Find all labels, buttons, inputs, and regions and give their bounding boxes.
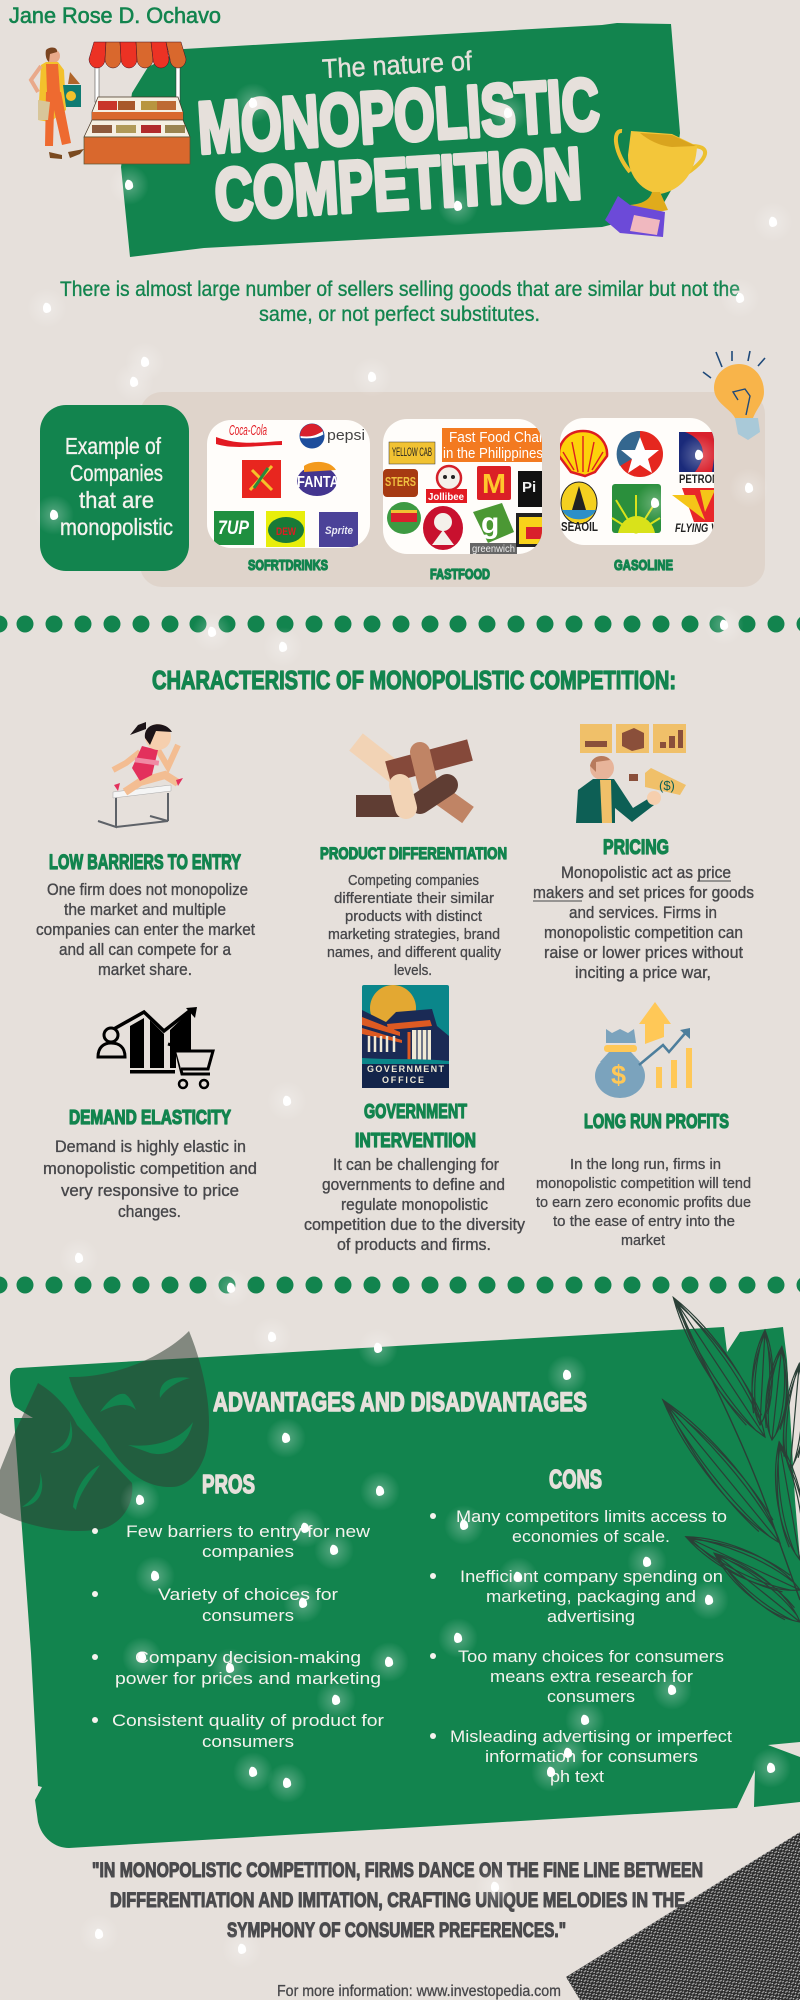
text: long run profits: monopolistic competition will tend [536, 1175, 751, 1192]
text: government intervention: of products and firms. [337, 1235, 491, 1254]
text: product differentiation: names, and different quality [327, 944, 501, 961]
list: pros: Few barriers to entry for new [126, 1522, 371, 1541]
icon: joined hands [356, 742, 470, 815]
text: government intervention: It can be challenging for [333, 1155, 499, 1174]
text: product differentiation: differentiate their similar [334, 890, 494, 907]
text: low barriers: the market and multiple [64, 900, 226, 919]
text: long run profits: to earn zero economic profits due [536, 1194, 751, 1211]
heading: pros: PROS [202, 1469, 255, 1499]
text: government intervention: governments to define and [322, 1175, 505, 1194]
callout: example of companies: Example of [65, 433, 162, 459]
label: gasoline: GASOLINE [614, 557, 673, 574]
logo card: soft drinks [207, 420, 370, 548]
title banner [121, 23, 680, 257]
logo card: gasoline: PETRON [679, 472, 719, 486]
logo card: soft drinks: Coca-Cola [229, 422, 267, 439]
text: long run profits: market [621, 1232, 666, 1249]
text: low barriers: market share. [98, 960, 192, 979]
icon: pricing: ($) [659, 778, 675, 793]
list: cons [430, 1507, 732, 1786]
list: pros: Company decision-making [135, 1648, 361, 1667]
text: long run profits: In the long run, firms in [570, 1156, 721, 1173]
logo card: soft drinks: pepsi [327, 427, 365, 444]
text: low barriers: One firm does not monopolize [47, 880, 248, 899]
divider: lower dots [0, 1276, 800, 1294]
text: product differentiation: levels. [394, 962, 432, 979]
icon: government office: GOVERNMENT [367, 1064, 444, 1074]
heading: long run profits: LONG RUN PROFITS [584, 1111, 729, 1133]
list: cons: Many competitors limits access to [456, 1507, 727, 1526]
quote: SYMPHONY OF CONSUMER PREFERENCES." [227, 1919, 566, 1942]
logo card: fast food: Jollibee [428, 492, 464, 503]
text: demand elasticity: monopolistic competition and [43, 1159, 257, 1178]
text: pricing: Monopolistic act as price [561, 863, 731, 882]
heading: cons: CONS [549, 1464, 602, 1494]
text: product differentiation: products with distinct [345, 908, 483, 925]
logo card: fast food [383, 419, 544, 555]
list: pros: power for prices and marketing [115, 1669, 381, 1688]
text: government intervention: competition due to the diversity [304, 1215, 525, 1234]
intro text: There is almost large number of sellers selling goods that are similar but not the [60, 278, 740, 301]
icon: theatre masks [0, 1331, 209, 1531]
list: pros: Variety of choices for [158, 1585, 338, 1604]
icon: government office: OFFICE [382, 1075, 424, 1085]
icon: long run profits: $ [611, 1060, 626, 1090]
text: government intervention: regulate monopolistic [341, 1195, 488, 1214]
heading: government intervention [355, 1101, 476, 1152]
list: cons: Misleading advertising or imperfect [450, 1727, 732, 1746]
quote [92, 1859, 703, 1942]
list: pros: companies [202, 1542, 294, 1561]
logo card: soft drinks: DEW [276, 526, 296, 538]
intro text: same, or not perfect substitutes. [259, 303, 540, 326]
title: monopolistic: MONOPOLISTIC [195, 64, 602, 169]
heading: government intervention: GOVERNMENT [364, 1101, 467, 1123]
list: cons: Too many choices for consumers [458, 1647, 724, 1666]
text: pricing: makers and set prices for goods [533, 883, 754, 902]
list: pros [92, 1522, 384, 1751]
logo card: fast food: Fast Food Chai [449, 429, 542, 446]
logo card: fast food: STERS [385, 474, 416, 489]
texture: knit fabric [560, 1830, 800, 2000]
list: cons: economies of scale. [512, 1527, 670, 1546]
text: demand elasticity: very responsive to price [61, 1181, 239, 1200]
intro text [60, 278, 740, 326]
callout: example of companies: Companies [70, 460, 163, 486]
icon: woman shopper [31, 48, 84, 159]
text: long run profits [536, 1156, 751, 1249]
logo card: soft drinks: FANTA [297, 474, 339, 491]
list: cons: consumers [547, 1687, 635, 1706]
list: cons: marketing, packaging and [486, 1587, 696, 1606]
author name: Jane Rose D. Ochavo [9, 3, 221, 28]
divider: upper dots [0, 616, 800, 632]
heading: demand elasticity: DEMAND ELASTICITY [69, 1107, 232, 1129]
icon: long run profits [595, 1002, 692, 1098]
logo card: fast food: M [482, 468, 506, 499]
text: long run profits: to the ease of entry into the [553, 1213, 735, 1230]
logo card: gasoline: SEAOIL [561, 519, 598, 534]
panel: advantages and disadvantages [10, 1327, 800, 1848]
heading: product differentiation: PRODUCT DIFFERENTIATION [320, 844, 507, 863]
text: low barriers: and all can compete for a [59, 940, 231, 959]
callout: example of companies: monopolistic [60, 514, 173, 540]
logo card: soft drinks: 7UP [218, 518, 249, 539]
footer source: For more information: www.investopedia.com [277, 1983, 561, 2000]
text: demand elasticity: changes. [118, 1202, 181, 1221]
logo card: gasoline [559, 418, 720, 545]
text: product differentiation: Competing companies [348, 872, 479, 889]
list: cons: ph text [550, 1767, 604, 1786]
label: softdrinks: SOFRTDRINKS [248, 557, 328, 574]
text: low barriers [36, 880, 255, 979]
heading: government intervention: INTERVENTIION [355, 1130, 476, 1152]
icon: light bulb [703, 351, 765, 440]
heading: pricing: PRICING [603, 836, 669, 859]
logo card: soft drinks: Sprite [325, 525, 353, 537]
text: pricing: raise or lower prices without [544, 943, 743, 962]
text: product differentiation [327, 872, 501, 979]
label: fastfood: FASTFOOD [430, 566, 490, 583]
callout: example of companies [40, 405, 189, 571]
text: pricing: inciting a price war, [575, 963, 711, 982]
text: pricing: monopolistic competition can [544, 923, 743, 942]
icon: hurdler [98, 722, 183, 827]
title: the nature of: The nature of [321, 46, 473, 84]
list: pros: consumers [202, 1732, 294, 1751]
text: product differentiation: marketing strategies, brand [328, 926, 500, 943]
list: pros: Consistent quality of product for [112, 1711, 384, 1730]
list: pros: consumers [202, 1606, 294, 1625]
title: competition: COMPETITION [212, 133, 584, 236]
text: pricing: and services. Firms in [569, 903, 717, 922]
text: low barriers: companies can enter the market [36, 920, 255, 939]
logo card: fast food: in the Philippines [443, 445, 543, 462]
icon: government office [362, 985, 449, 1088]
text: government intervention [304, 1155, 525, 1254]
text: pricing [533, 863, 754, 982]
logo card: gasoline: FLYING V [675, 521, 718, 535]
list: cons: Inefficient company spending on [460, 1567, 723, 1586]
text: demand elasticity: Demand is highly elastic in [55, 1137, 246, 1156]
icon: pricing [576, 724, 686, 823]
list: cons: information for consumers [485, 1747, 698, 1766]
panel: company examples [140, 392, 765, 587]
icon: demand chart and cart [98, 1007, 213, 1088]
icon: market stall [84, 42, 190, 164]
callout: example of companies: that are [79, 487, 154, 513]
decoration: leaves [653, 1290, 800, 1631]
list: cons: advertising [547, 1607, 635, 1626]
logo card: fast food: YELLOW CAB [392, 445, 432, 459]
logo card: fast food: greenwich [472, 544, 515, 555]
icon: trophy [605, 131, 705, 237]
heading: low barriers: LOW BARRIERS TO ENTRY [49, 851, 241, 874]
text: demand elasticity [43, 1137, 257, 1221]
logo card: fast food: g [481, 507, 499, 540]
logo card: fast food: Pi [522, 479, 536, 496]
heading: advantages and disadvantages: ADVANTAGES AND DISADVANTAGES [213, 1387, 587, 1417]
list: cons: means extra research for [490, 1667, 693, 1686]
